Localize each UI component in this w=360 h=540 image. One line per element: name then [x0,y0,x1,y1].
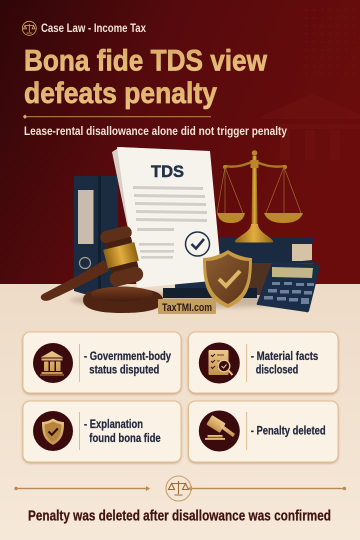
background: left dot texture [0,150,70,270]
icon: scales badge [22,21,36,35]
card text: - Material facts [251,351,318,363]
brand tag [158,299,216,314]
TDS document [112,147,222,288]
icon: gavel [199,410,240,452]
card: material facts [188,332,338,393]
calculator [257,262,320,312]
card text: status disputed [89,364,159,376]
binder [74,176,118,294]
card text [84,351,171,376]
card: government-body status [23,332,181,393]
gavel [41,224,163,313]
subtitle: Lease-rental disallowance alone did not trigger penalty [24,124,287,138]
footer divider with scales [14,476,346,501]
card text: disclosed [256,364,298,376]
icon: courthouse [33,343,73,383]
background: faint courthouse [262,94,360,160]
background: maroon header [0,0,360,290]
scales of justice [217,150,303,242]
icon: checklist with magnifier [199,342,240,384]
card: explanation bona fide [23,401,181,462]
title: Bona fide TDS view [24,44,267,78]
card text: - Government-body [84,351,171,363]
stacked books [163,237,315,298]
card text: - Penalty deleted [251,426,326,438]
card text [84,419,161,445]
card text: found bona fide [89,433,161,445]
hero illustration [41,147,320,314]
title: defeats penalty [24,77,218,110]
icon: shield check [33,411,73,451]
TDS document: TDS [151,162,184,181]
label: case law: Case Law - Income Tax [41,23,146,35]
card text: - Explanation [84,419,143,431]
title divider [23,114,211,119]
icon: scales [166,476,191,501]
card text [251,351,318,376]
header badge [22,21,146,35]
title [24,44,267,110]
card: penalty deleted [188,401,338,462]
shadow under objects [70,292,310,308]
brand tag: TaxTMI.com [162,302,212,314]
shield [203,250,252,308]
background: table surface [0,284,360,540]
background: dot texture [300,8,360,78]
